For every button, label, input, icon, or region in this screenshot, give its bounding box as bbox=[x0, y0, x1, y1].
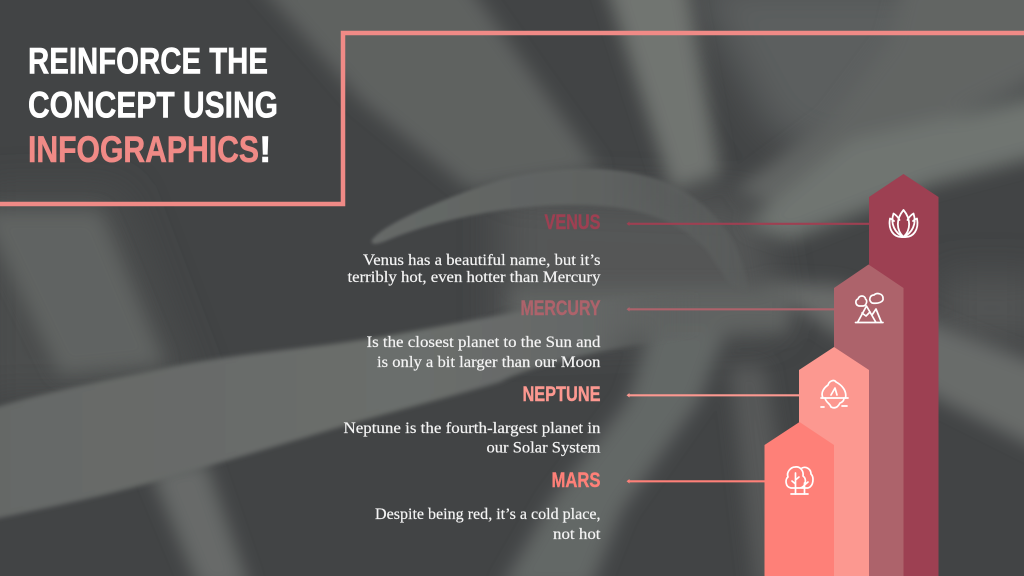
icon: trees bbox=[786, 467, 813, 494]
text: neptune bbox=[344, 420, 601, 456]
title: ! bbox=[259, 128, 272, 170]
title frame bbox=[0, 33, 1024, 204]
connector: venus bbox=[626, 222, 869, 226]
connector: mars bbox=[626, 479, 765, 484]
heading: venus: VENUS bbox=[544, 211, 600, 234]
icon: iceberg bbox=[821, 381, 848, 408]
icon: lotus bbox=[890, 210, 917, 237]
curved leaf bbox=[372, 169, 748, 290]
text: mercury bbox=[366, 334, 601, 371]
title: INFOGRAPHICS bbox=[28, 128, 259, 170]
title bbox=[28, 40, 278, 170]
text: venus: terribly hot, even hotter than Mercury bbox=[348, 269, 601, 286]
bar: mercury bbox=[834, 264, 904, 576]
icon: mountains bbox=[856, 294, 883, 322]
item: venus bbox=[348, 211, 601, 286]
connector: neptune bbox=[626, 393, 799, 398]
text: neptune: our Solar System bbox=[486, 440, 600, 456]
item: mercury bbox=[366, 297, 601, 371]
arrow chart bbox=[764, 174, 938, 576]
text: venus: Venus has a beautiful name, but it’s bbox=[363, 252, 600, 269]
connector: mercury bbox=[626, 307, 834, 312]
bar: neptune bbox=[799, 347, 869, 576]
item: neptune bbox=[344, 383, 601, 456]
heading: neptune: NEPTUNE bbox=[522, 383, 600, 406]
item: mars bbox=[375, 469, 601, 543]
title: CONCEPT USING bbox=[28, 84, 278, 126]
text: neptune: Neptune is the fourth-largest planet in bbox=[344, 420, 601, 437]
text: mars: not hot bbox=[553, 526, 601, 543]
text: mars: Despite being red, it’s a cold place, bbox=[375, 506, 600, 523]
text: mercury: is only a bit larger than our Moon bbox=[377, 354, 601, 371]
bar: venus bbox=[869, 174, 938, 576]
bar: mars bbox=[764, 422, 834, 576]
text: mercury: Is the closest planet to the Sun and bbox=[366, 334, 601, 351]
text: venus bbox=[348, 252, 601, 286]
long leaf bbox=[0, 293, 700, 520]
title: REINFORCE THE bbox=[28, 40, 268, 82]
heading: mercury: MERCURY bbox=[520, 297, 600, 320]
heading: mars: MARS bbox=[552, 469, 600, 492]
text: mars bbox=[375, 506, 601, 543]
